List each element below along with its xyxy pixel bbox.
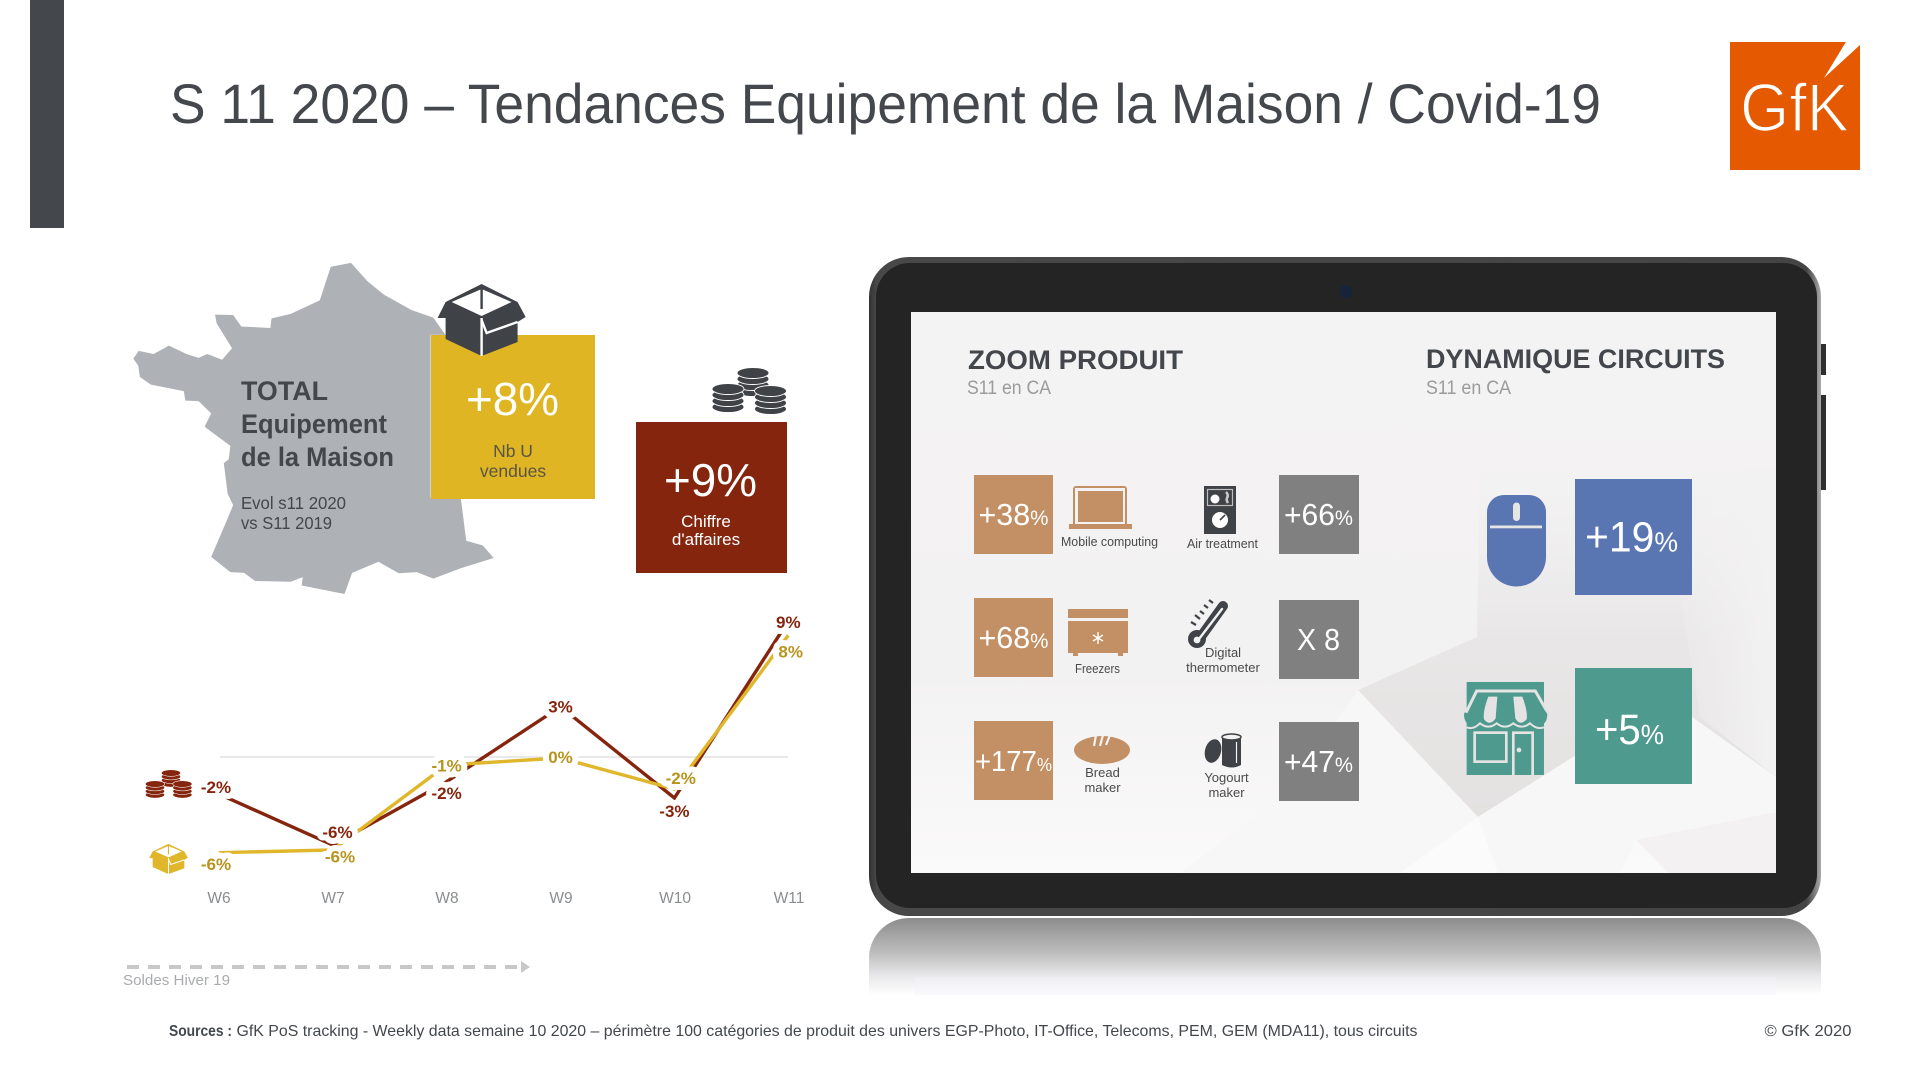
series: revenue xyxy=(219,621,788,845)
heading: total: de la Maison xyxy=(241,442,394,472)
icon: coins legend xyxy=(145,770,192,798)
icon: coins xyxy=(712,368,786,414)
subheading: zoom produit: S11 en CA xyxy=(967,378,1051,399)
subtitle: period: Evol s11 2020 xyxy=(241,493,346,513)
line chart: weekly trend xyxy=(145,613,804,907)
icon: air treatment xyxy=(1204,486,1236,534)
icon: box legend xyxy=(149,844,188,874)
tile: bread maker: +177% xyxy=(975,746,1052,778)
labels: revenue values xyxy=(201,613,801,842)
tablet bezel xyxy=(876,263,1817,908)
label: air treatment: Air treatment xyxy=(1187,536,1258,551)
title: S 11 2020 – Tendances Equipement de la Maison / Covid-19 xyxy=(170,72,1601,135)
tile: yogurt maker xyxy=(1279,722,1359,801)
label: freezers: Freezers xyxy=(1075,661,1120,676)
France map xyxy=(133,263,494,594)
labels: revenue values: -3% xyxy=(659,802,690,821)
KPI: revenue +9%: d'affaires xyxy=(672,530,740,549)
sources note: GfK PoS tracking - Weekly data semaine 10 2020 – périmètre 100 catégories de produit des univers EGP-Photo, IT-Office, Telecoms, PEM, GEM (MDA11), tous circuits xyxy=(236,1023,1418,1040)
axis labels: weeks: W9 xyxy=(549,890,573,907)
heading: total: Equipement xyxy=(241,409,387,439)
labels: units values: -6% xyxy=(325,848,355,867)
GfK logo: GfK xyxy=(1740,70,1849,146)
label: mobile computing: Mobile computing xyxy=(1061,534,1158,549)
label: yogurt maker: maker xyxy=(1208,785,1245,800)
tile: freezers: +68% xyxy=(978,620,1048,655)
tile: digital thermometer xyxy=(1279,600,1359,679)
tile: mobile computing xyxy=(974,475,1053,554)
labels: revenue values: -2% xyxy=(431,784,462,803)
axis labels: weeks xyxy=(207,890,804,907)
tile: stores +5% xyxy=(1575,668,1692,784)
subheading: dynamique circuits: S11 en CA xyxy=(1426,378,1511,399)
sources note: Sources : xyxy=(169,1023,232,1040)
icon: bread xyxy=(1074,735,1130,764)
labels: revenue values: -2% xyxy=(201,778,231,797)
heading: total xyxy=(241,376,394,472)
header accent bar xyxy=(30,0,64,228)
copyright: © GfK 2020 xyxy=(1764,1023,1852,1040)
tablet reflection xyxy=(869,918,1821,995)
label: bread maker xyxy=(1084,765,1121,795)
icon: thermometer xyxy=(1188,600,1223,648)
labels: units values: 8% xyxy=(778,643,803,662)
tile: air treatment: +66% xyxy=(1284,497,1353,532)
heading: total: TOTAL xyxy=(241,376,328,406)
labels: units values: -2% xyxy=(666,769,696,788)
KPI: units +8% xyxy=(431,335,595,499)
label: digital thermometer: thermometer xyxy=(1186,660,1261,675)
KPI: revenue +9% xyxy=(636,422,787,573)
axis labels: weeks: W6 xyxy=(207,890,231,907)
caption: winter sales: Soldes Hiver 19 xyxy=(123,972,230,989)
labels: revenue values: 3% xyxy=(548,698,573,717)
labels: units values xyxy=(201,643,803,874)
label: bread maker: Bread xyxy=(1085,765,1120,780)
tile: digital thermometer: X 8 xyxy=(1297,622,1340,657)
labels: units values: -1% xyxy=(431,757,462,776)
label: yogurt maker: Yogourt xyxy=(1204,770,1249,785)
tile: yogurt maker: +47% xyxy=(1284,744,1353,779)
icon: freezer xyxy=(1068,609,1128,656)
label: bread maker: maker xyxy=(1084,780,1121,795)
series: units xyxy=(219,635,788,853)
label: yogurt maker xyxy=(1204,770,1249,800)
KPI: revenue +9%: Chiffre xyxy=(681,512,731,531)
label: digital thermometer xyxy=(1186,645,1261,675)
axis labels: weeks: W10 xyxy=(659,890,691,907)
GfK logo xyxy=(1730,41,1861,170)
label: digital thermometer: Digital xyxy=(1205,645,1241,660)
icon: open box xyxy=(438,284,526,356)
KPI: units +8%: vendues xyxy=(480,461,546,481)
heading: zoom produit: ZOOM PRODUIT xyxy=(968,345,1183,375)
heading: dynamique circuits: DYNAMIQUE CIRCUITS xyxy=(1426,344,1725,374)
KPI: revenue +9%: +9% xyxy=(664,454,757,506)
panel: France total xyxy=(133,263,787,594)
tile: freezers xyxy=(974,598,1053,677)
subtitle: period: vs S11 2019 xyxy=(241,513,332,533)
tile: online +19% xyxy=(1575,479,1692,595)
icon: laptop xyxy=(1069,486,1132,529)
screen xyxy=(911,312,1776,873)
axis labels: weeks: W8 xyxy=(435,890,459,907)
tablet frame xyxy=(869,257,1821,916)
tile: mobile computing: +38% xyxy=(978,497,1048,532)
camera xyxy=(1340,285,1352,298)
arrow: winter sales period xyxy=(127,961,530,973)
tile: stores +5%: +5% xyxy=(1595,706,1664,754)
tile: air treatment xyxy=(1279,475,1359,554)
tile: bread maker xyxy=(974,721,1053,800)
labels: revenue values: -6% xyxy=(322,823,353,842)
icon: mouse xyxy=(1487,495,1546,586)
labels: units values: 0% xyxy=(548,748,573,767)
subtitle: period xyxy=(241,493,346,533)
labels: revenue values: 9% xyxy=(776,613,801,632)
labels: units values: -6% xyxy=(201,855,231,874)
axis labels: weeks: W7 xyxy=(321,890,345,907)
tablet mockup xyxy=(869,257,1826,916)
icon: store xyxy=(1464,682,1547,775)
tablet side buttons xyxy=(1821,344,1826,490)
tile: online +19%: +19% xyxy=(1585,514,1678,562)
KPI: units +8%: +8% xyxy=(466,373,559,425)
icon: yogurt maker xyxy=(1202,734,1241,768)
KPI: units +8%: Nb U xyxy=(493,441,533,461)
axis labels: weeks: W11 xyxy=(774,890,804,907)
